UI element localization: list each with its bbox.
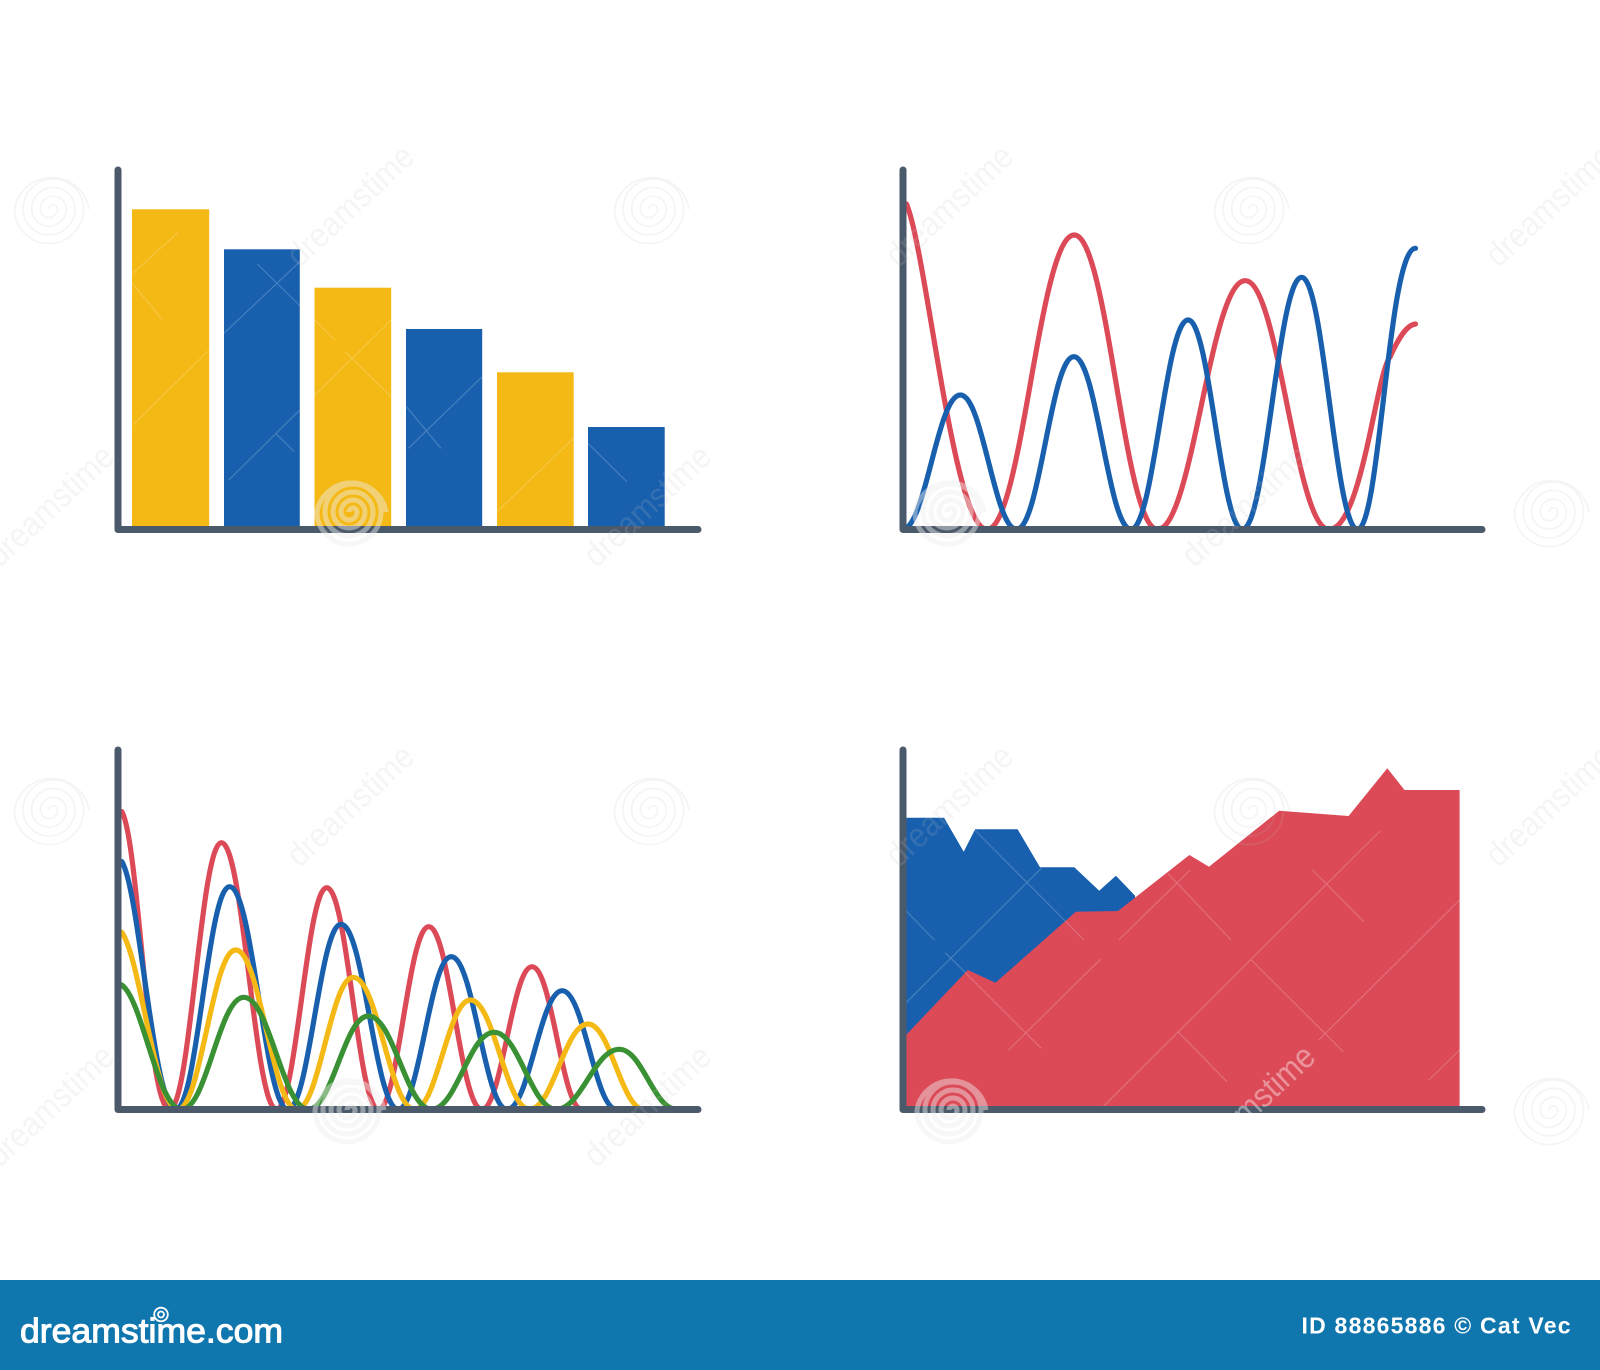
panel: two-line wave chart, top right xyxy=(902,170,1482,530)
line chart curves xyxy=(122,812,677,1109)
panel: area chart, bottom right xyxy=(900,750,1482,1113)
watermark pattern xyxy=(0,137,1600,1174)
red area xyxy=(906,768,1460,1106)
footer image id and credit: ID 88865886 © Cat Vec xyxy=(1302,1312,1571,1338)
watermark pattern: dreamstime xyxy=(576,437,719,574)
watermark pattern: dreamstime xyxy=(1180,1037,1323,1174)
icon: spiral logo mark xyxy=(154,1308,168,1321)
footer logo text: dreamstime.com xyxy=(20,1312,283,1350)
chart axes xyxy=(903,170,1482,530)
bar chart columns xyxy=(132,209,665,526)
watermark pattern: dreamstime xyxy=(878,137,1021,274)
watermark pattern: dreamstime xyxy=(279,137,422,274)
panel: four-line decaying wave chart, bottom left xyxy=(118,750,698,1110)
blue area xyxy=(906,818,1135,1106)
chart axes xyxy=(118,170,698,530)
watermark pattern: dreamstime xyxy=(576,1037,719,1174)
footer bar xyxy=(0,1280,1600,1370)
watermark pattern: dreamstime xyxy=(279,737,422,874)
chart axes xyxy=(118,750,698,1110)
watermark pattern: dreamstime xyxy=(878,737,1021,874)
chart axes xyxy=(903,750,1482,1110)
panel: bar chart, top left xyxy=(118,170,698,530)
watermark pattern: dreamstime xyxy=(1174,437,1317,574)
line chart curves xyxy=(902,204,1416,529)
